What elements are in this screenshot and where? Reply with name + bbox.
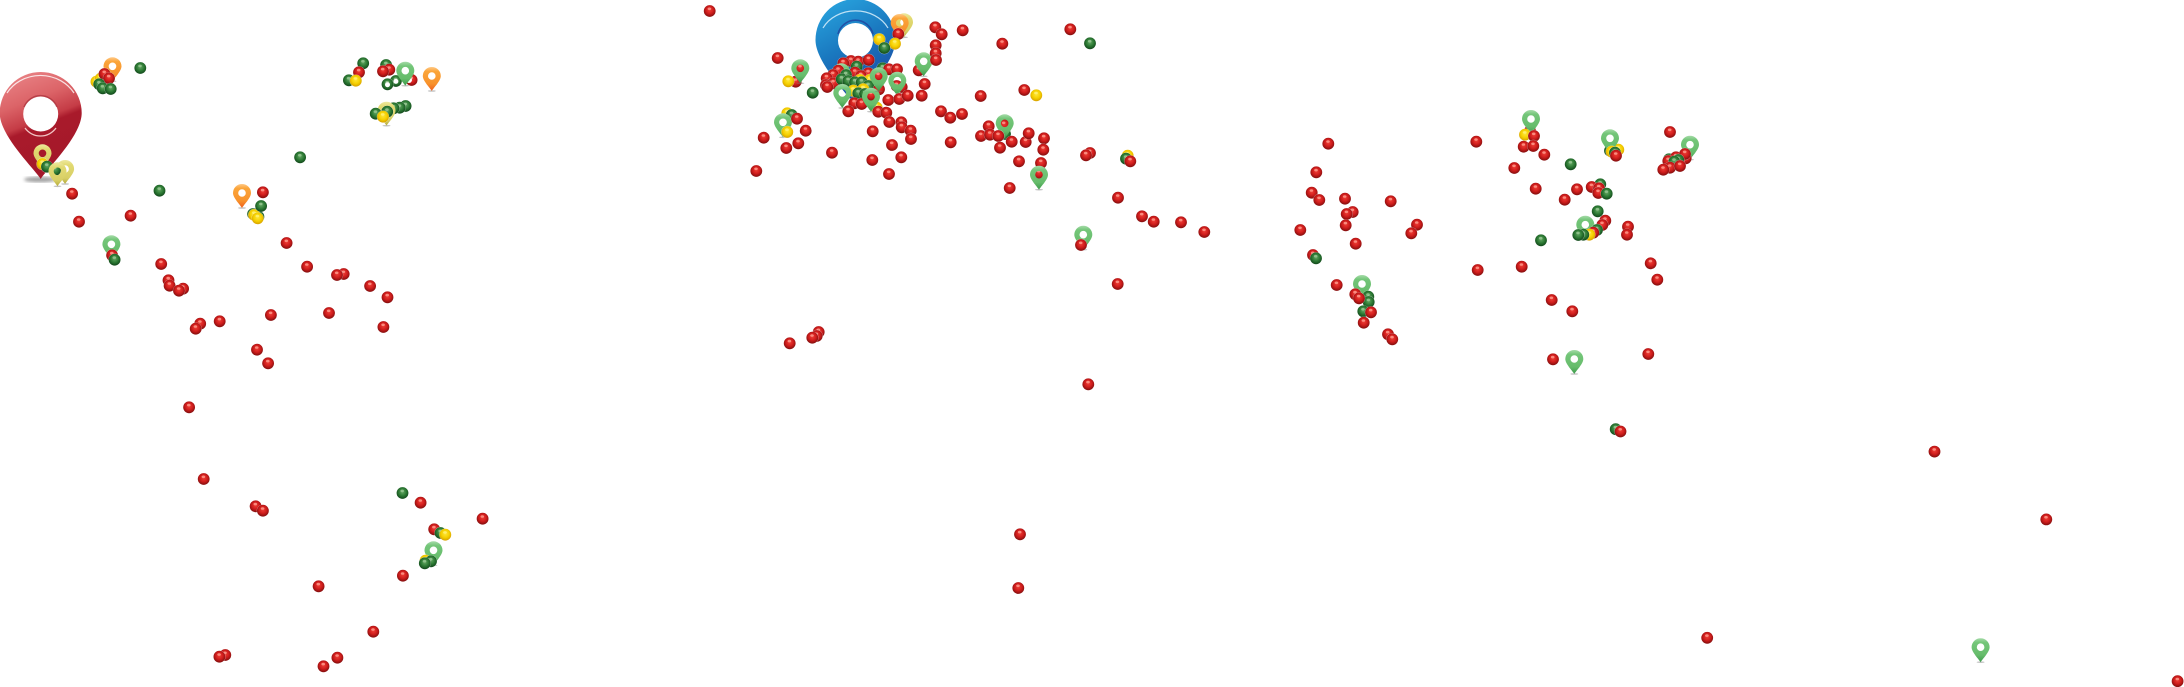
markers in the southern central group xyxy=(784,326,1026,594)
pins and markers at the far west xyxy=(34,57,306,266)
large red pin xyxy=(0,72,82,182)
markers in the central-west band xyxy=(155,237,394,413)
markers around the central cluster xyxy=(704,5,1211,390)
markers in the eastern group xyxy=(1470,110,1699,375)
dense central marker cluster xyxy=(820,13,914,128)
markers in the central-east group xyxy=(1294,138,1423,345)
pins and markers in the north-west group xyxy=(233,57,441,224)
markers in the south-west group xyxy=(198,473,489,672)
large blue pin xyxy=(816,0,896,106)
markers in the far south-east xyxy=(1610,423,2184,687)
